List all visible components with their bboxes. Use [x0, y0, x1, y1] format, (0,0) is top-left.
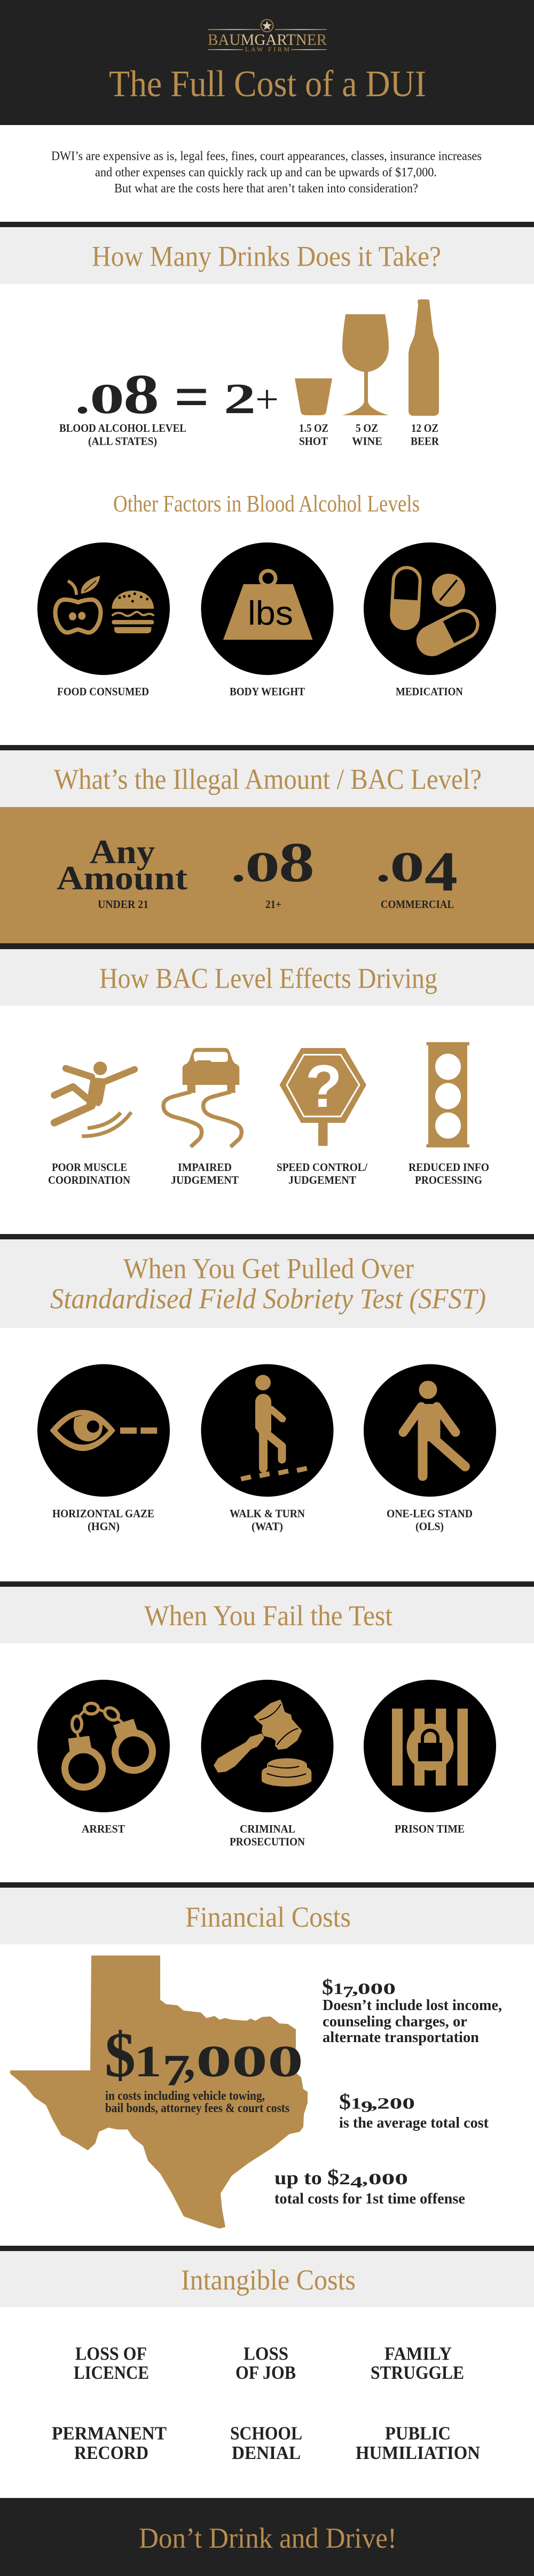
icon: walk and turn [201, 1364, 333, 1496]
title: The Full Cost of a DUI [109, 64, 426, 105]
panel: illegal amount [0, 745, 534, 943]
panel: footer [0, 2498, 534, 2576]
label: commercial: COMMERCIAL [381, 898, 454, 911]
equals sign: = [174, 364, 209, 430]
stat: .08: 8 [279, 831, 315, 894]
heading: pulled over and SFST [50, 1253, 486, 1315]
label: walk and turn: WALK & TURN [230, 1507, 305, 1520]
label: impaired judgement: JUDGEMENT [171, 1174, 239, 1186]
callout: $17,000: alternate transportation [323, 2029, 479, 2046]
stat: $17,000 in Texas: 7 [162, 2046, 190, 2096]
label: one-leg stand [387, 1507, 473, 1533]
icon: body weight [201, 542, 333, 675]
stat: any amount [57, 833, 188, 897]
item: permanent record: PERMANENT [52, 2423, 167, 2443]
stat: .04: . [376, 844, 390, 891]
item: loss of job: OF JOB [235, 2362, 296, 2383]
label: poor muscle coordination: COORDINATION [48, 1174, 130, 1186]
closing message: Don’t Drink and Drive! [139, 2522, 397, 2554]
label: one-leg stand: (OLS) [415, 1520, 444, 1533]
callout: $17,000: counseling charges, or [323, 2013, 467, 2030]
icon: gavel [201, 1680, 333, 1812]
stat: $17,000 in Texas [105, 2019, 303, 2115]
callout: $19,200: 9 [361, 2098, 373, 2115]
callout: $17,000: Doesn’t include lost income, [323, 1997, 502, 2014]
label: shot [299, 422, 328, 448]
label: blood alcohol level: (ALL STATES) [88, 435, 157, 448]
stat: $17,000 in Texas: in costs including vehicle towing, [105, 2089, 265, 2103]
icon: medication [364, 542, 496, 675]
stat: 2+: + [255, 377, 279, 422]
callout: $17,000 [322, 1975, 502, 2046]
label: one-leg stand: ONE-LEG STAND [387, 1507, 473, 1520]
panel: intangible costs [0, 2246, 534, 2463]
label: reduced info processing: PROCESSING [415, 1174, 482, 1186]
item: loss of job [235, 2343, 296, 2383]
stat: .08: 0 [245, 844, 280, 891]
label: criminal prosecution: PROSECUTION [230, 1835, 305, 1848]
panel: how many drinks [0, 222, 534, 448]
item: school denial: SCHOOL [230, 2423, 302, 2443]
stat: $17,000 in Texas: , [184, 2037, 195, 2086]
label: poor muscle coordination: POOR MUSCLE [52, 1161, 127, 1174]
panel: when you get pulled over [0, 1234, 534, 1533]
icon: wine glass [342, 314, 389, 415]
callout: up to $24,000: 4 [350, 2174, 363, 2191]
text block: introduction [51, 150, 482, 196]
callout: up to $24,000 [274, 2165, 465, 2207]
panel: when you fail the test [0, 1581, 534, 1848]
item: permanent record [52, 2423, 167, 2463]
logo: Baumgartner Law Firm: BAUMGARTNER [208, 31, 327, 49]
item: loss of licence [74, 2343, 149, 2383]
item: family struggle: FAMILY [384, 2343, 452, 2364]
stat: .08: 8 [123, 363, 159, 425]
stat: any amount: Amount [57, 859, 188, 897]
icon: traffic light [426, 1042, 469, 1147]
item: school denial: DENIAL [232, 2442, 301, 2463]
heading: when you fail: When You Fail the Test [144, 1600, 392, 1632]
label: criminal prosecution: CRIMINAL [240, 1822, 295, 1835]
icon: beer bottle [409, 299, 439, 416]
icon: shot glass [295, 378, 332, 415]
stat: $17,000 in Texas: $ [105, 2019, 136, 2090]
label: reduced info processing: REDUCED INFO [409, 1161, 489, 1174]
label: wine [352, 422, 382, 448]
heading: intangible costs: Intangible Costs [181, 2264, 356, 2296]
heading: other factors: Other Factors in Blood Alcohol Levels [113, 491, 420, 517]
label: beer [411, 422, 439, 448]
label: reduced info processing [409, 1161, 489, 1186]
label: beer: 12 OZ [411, 422, 438, 434]
callout: up to $24,000: up to [274, 2167, 327, 2189]
label: horizontal gaze: HORIZONTAL GAZE [52, 1507, 154, 1520]
label: poor muscle coordination [48, 1161, 130, 1186]
panel: other factors [37, 491, 496, 698]
callout: up to $24,000: 000 [368, 2170, 408, 2188]
callout: up to $24,000: total costs for 1st time offense [274, 2190, 465, 2207]
stat: 2+: 2 [224, 375, 256, 423]
map: Texas [10, 1956, 308, 2229]
item: loss of licence: LICENCE [74, 2362, 149, 2383]
label: arrest: ARREST [82, 1822, 125, 1835]
item: school denial [230, 2423, 302, 2463]
heading: financial costs: Financial Costs [185, 1901, 351, 1933]
label: walk and turn: (WAT) [252, 1520, 283, 1533]
label: beer: BEER [411, 435, 439, 448]
label: medication: MEDICATION [396, 685, 463, 698]
icon: prison bars [364, 1680, 496, 1812]
callout: $19,200: is the average total cost [339, 2114, 489, 2131]
heading: pulled over and SFST: Standardised Field Sobriety Test (SFST) [50, 1283, 486, 1315]
label: walk and turn [230, 1507, 305, 1533]
callout: $19,200: $ [339, 2090, 351, 2113]
label: impaired judgement: IMPAIRED [178, 1161, 232, 1174]
label: wine: WINE [352, 435, 382, 448]
panel: header [0, 0, 534, 125]
icon: question sign: ? [305, 1053, 342, 1120]
stat: any amount: Any [90, 833, 155, 871]
item: loss of job: LOSS [244, 2343, 288, 2364]
label: blood alcohol level: BLOOD ALCOHOL LEVEL [59, 422, 186, 434]
icon: food consumed [37, 542, 170, 675]
item: permanent record: RECORD [74, 2442, 148, 2463]
icon: question sign [280, 1048, 366, 1146]
label: blood alcohol level [59, 422, 186, 448]
label: horizontal gaze [52, 1507, 154, 1533]
label: impaired judgement [171, 1161, 239, 1186]
heading: how BAC affects driving: How BAC Level Effects Driving [99, 962, 437, 994]
callout: $17,000: 7 [343, 1983, 354, 2001]
heading: how many drinks: How Many Drinks Does it Take? [92, 240, 441, 273]
text block: introduction: But what are the costs here that aren’t taken into consideration? [114, 182, 418, 196]
stat: $17,000 in Texas: bail bonds, attorney fees & court costs [105, 2101, 289, 2115]
label: prison time: PRISON TIME [395, 1822, 465, 1835]
item: family struggle [371, 2343, 464, 2383]
label: body weight: BODY WEIGHT [230, 685, 305, 698]
stat: .08: . [75, 376, 90, 423]
callout: up to $24,000: $ [327, 2165, 339, 2189]
icon: horizontal gaze [37, 1364, 170, 1496]
item: public humiliation: HUMILIATION [356, 2442, 480, 2463]
item: family struggle: STRUGGLE [371, 2362, 464, 2383]
stat: .04: 0 [390, 844, 425, 891]
label: shot: SHOT [299, 435, 328, 448]
logo: Baumgartner Law Firm: LAW FIRM [245, 45, 289, 53]
item: public humiliation: PUBLIC [385, 2423, 451, 2443]
callout: up to $24,000: , [362, 2170, 368, 2188]
label: shot: 1.5 OZ [299, 422, 328, 434]
stat: .08: 0 [90, 376, 124, 423]
label: 21+: 21+ [265, 898, 281, 911]
callout: $17,000: 000 [358, 1980, 396, 1998]
logo: Baumgartner Law Firm [208, 19, 327, 53]
stat: .04: 4 [425, 840, 458, 903]
label: speed control judgement: JUDGEMENT [288, 1174, 356, 1186]
heading: illegal amount: What’s the Illegal Amount / BAC Level? [54, 763, 482, 795]
label: wine: 5 OZ [356, 422, 378, 434]
panel: BAC effects on driving [0, 943, 534, 1186]
icon: one-leg stand [364, 1364, 496, 1496]
text block: introduction: DWI’s are expensive as is, legal fees, fines, court appearances, classes, insurance increases [51, 150, 482, 164]
callout: $17,000: 1 [333, 1980, 343, 1998]
text block: introduction: and other expenses can quickly rack up and can be upwards of $17,000. [95, 166, 437, 180]
callout: $19,200: 200 [377, 2095, 415, 2112]
stat: $17,000 in Texas: 1 [134, 2037, 162, 2086]
label: speed control judgement [277, 1161, 368, 1186]
stat: .08: . [231, 844, 246, 891]
icon: swerving car [163, 1048, 241, 1147]
callout: up to $24,000: 2 [339, 2170, 350, 2188]
callout: $17,000: $ [322, 1975, 333, 1999]
label: horizontal gaze: (HGN) [88, 1520, 120, 1533]
label: criminal prosecution [230, 1822, 305, 1848]
item: loss of licence: LOSS OF [75, 2343, 147, 2364]
icon: handcuffs [37, 1680, 170, 1812]
callout: $17,000: , [352, 1980, 358, 1998]
label: speed control judgement: SPEED CONTROL/ [277, 1161, 368, 1174]
callout: $19,200: 1 [351, 2095, 362, 2112]
label: food consumed: FOOD CONSUMED [57, 685, 149, 698]
icon: body weight: lbs [248, 595, 293, 632]
panel: financial costs [0, 1882, 534, 2229]
heading: pulled over and SFST: When You Get Pulled Over [123, 1253, 414, 1285]
icon: falling person [54, 1061, 135, 1136]
item: public humiliation [356, 2423, 480, 2463]
stat: $17,000 in Texas: 000 [196, 2037, 303, 2086]
label: under 21: UNDER 21 [98, 898, 148, 911]
callout: $19,200: , [371, 2095, 378, 2112]
callout: $19,200 [339, 2090, 489, 2131]
